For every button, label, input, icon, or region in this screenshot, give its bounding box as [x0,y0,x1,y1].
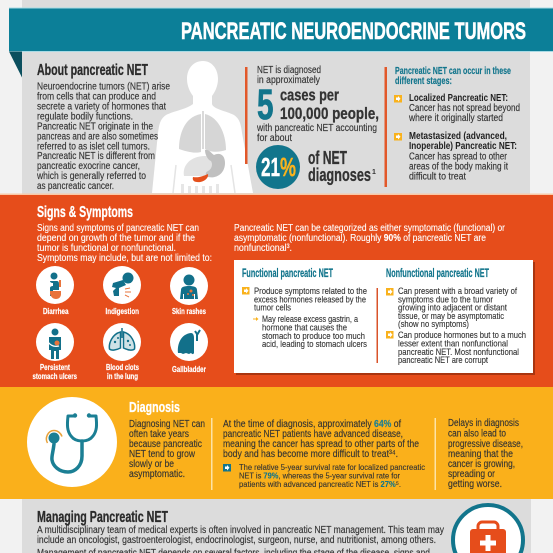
text: advanced disease statistics: meaning the cancer has spread to other parts of the [223,439,419,450]
text: diagnosing NET: often take years [129,429,189,440]
label: indigestion: Indigestion [106,306,139,316]
column: functional pancreatic NET: tumor cells [254,302,291,312]
label: blood clots in the lung: Blood clots [106,362,139,372]
statistic: 21% of NET diagnoses [256,145,376,189]
icon: medical kit [453,505,523,553]
text: advanced disease statistics: NET is 79%, whereas the 5-year survival rate for [239,470,400,480]
text: diagnosing NET: Diagnosing NET can [129,419,205,430]
text: managing paragraph: A multidisciplinary team of medical experts is often involved in pancreatic NET management. This team may [37,525,444,536]
text: diagnosing NET: slowly or be [129,459,174,470]
heading: managing pancreatic NET: Managing Pancreatic NET [37,509,168,526]
text: symptoms intro: Signs and symptoms of pancreatic NET can [37,223,199,234]
statistic: 21% of NET diagnoses: 1 [372,169,376,176]
heading: about pancreatic NET: About pancreatic NET [37,62,148,79]
column: nonfunctional pancreatic NET: Can present with a broad variety of [398,286,517,296]
label: blood clots in the lung: in the lung [107,371,138,381]
text: symptoms intro: Symptoms may include, but are not limited to: [37,253,212,264]
label: skin rashes: Skin rashes [172,306,206,316]
text: about paragraph: as pancreatic cancer. [37,181,114,192]
text: stages of pancreatic NET [394,65,520,182]
text: about paragraph: regulate bodily functions. [37,112,133,122]
text: about paragraph: Pancreatic NET originate in the [37,122,153,132]
column: functional pancreatic NET: acid, leading to stomach ulcers [262,339,367,349]
label: persistent stomach ulcers: stomach ulcers [32,371,77,381]
statistic: 5 cases per 100,000 people: cases per [280,86,339,104]
text: symptoms intro: depend on growth of the tumor and if the [37,233,195,244]
text: stages of pancreatic NET: difficult to treat [409,172,466,182]
statistic: 5 cases per 100,000 people: 5 [257,81,274,129]
column: functional pancreatic NET: May release excess gastrin, a [262,314,358,324]
statistic: 21% of NET diagnoses: % [280,152,296,182]
column: functional pancreatic NET: stomach to produce too much [262,331,365,341]
column: nonfunctional pancreatic NET: symptoms due to the tumor [398,294,493,304]
column: nonfunctional pancreatic NET [386,266,526,365]
statistic: 5 cases per 100,000 people: in approximately [257,75,320,86]
text: about paragraph: secrete a variety of hormones that [37,102,166,112]
panel: diagnosis [0,387,553,499]
text: diagnosing NET: because pancreatic [129,439,202,450]
text: stages of pancreatic NET: different stages: [395,75,452,87]
text: diagnosing NET [129,419,205,480]
text: diagnosing NET: NET tend to grow [129,449,196,460]
column: nonfunctional pancreatic NET: (show no symptoms) [398,319,469,329]
card: functional vs nonfunctional [234,260,535,375]
column: nonfunctional pancreatic NET: Nonfunctional pancreatic NET [386,266,489,280]
icon: indigestion [103,266,141,316]
label: diarrhea: Diarrhea [43,306,69,316]
statistic: 5 cases per 100,000 people [256,65,379,144]
text: delays in diagnosis: progressive disease, [448,439,523,450]
text: about paragraph: from cells that can produce and [37,92,156,102]
text: advanced disease statistics: The relative 5-year survival rate for localized pancreatic [239,462,426,472]
icon: persistent stomach ulcers [32,323,77,381]
icon: stethoscope [27,397,117,487]
heading: signs and symptoms: Signs & Symptoms [37,204,133,221]
label: gallbladder: Gallbladder [172,364,207,374]
statistic: 21% of NET diagnoses: of NET [308,148,347,168]
text: stages of pancreatic NET: areas of the body making it [409,162,508,172]
panel: about and statistics [22,0,530,194]
text: about paragraph: which is generally referred to [36,171,146,182]
column: functional pancreatic NET: hormone that causes the [262,322,347,332]
text: symptoms intro: tumor is functional or nonfunctional. [37,243,176,254]
text: about paragraph: Neuroendocrine tumors (NET) arise [37,82,170,92]
text: functional classification intro [234,223,506,254]
column: functional pancreatic NET: excess hormones released by the [254,294,366,304]
text: advanced disease statistics: body and has become more difficult to treat³⁴. [223,449,398,460]
column: nonfunctional pancreatic NET: tissue, or may be asymptomatic [398,311,504,321]
text: managing paragraph: include an oncologist, gastroenterologist, endocrinologist, surgeon, nurse, and nutritionist, among others. [37,535,436,546]
text: advanced disease statistics: At the time of diagnosis, approximately 64% of [223,419,401,430]
text: functional classification intro: Pancreatic NET can be categorized as either symptomatic (functional) or [234,223,506,234]
text: delays in diagnosis: meaning that the [448,449,513,460]
statistic: 5 cases per 100,000 people: with pancreatic NET accounting [256,123,377,134]
statistic: 5 cases per 100,000 people: 100,000 people, [280,104,379,123]
statistic: 21% of NET diagnoses: diagnoses [308,165,371,185]
text: stages of pancreatic NET: Localized Pancreatic NET: [409,93,508,104]
column: functional pancreatic NET: Produce symptoms related to the [254,286,367,296]
text: about paragraph: pancreas and are also sometimes [37,132,158,142]
statistic: 5 cases per 100,000 people: for about [257,133,292,144]
statistic: 21% of NET diagnoses: 21 [261,152,280,182]
label: persistent stomach ulcers [32,362,77,381]
text: functional classification intro: nonfunctional³. [234,243,292,254]
text: stages of pancreatic NET: Inoperable) Pancreatic NET: [409,141,517,152]
heading: diagnosis: Diagnosis [129,400,180,416]
label: blood clots in the lung [106,362,139,381]
column: nonfunctional pancreatic NET: pancreatic NET are corrupt [398,355,488,365]
icon: diarrhea [36,266,74,316]
text: symptoms intro [37,223,212,264]
text: advanced disease statistics: pancreatic NET patients have advanced disease, [223,429,403,440]
text: about paragraph: referred to as islet cell tumors. [37,142,150,152]
text: about paragraph: pancreatic exocrine cancer, [37,161,140,172]
text: delays in diagnosis: Delays in diagnosis [448,418,519,429]
text: delays in diagnosis: can also lead to [448,428,506,440]
column: nonfunctional pancreatic NET: pancreatic NET. Most nonfunctional [398,347,519,357]
panel: managing pancreatic NET [22,499,531,553]
text: about paragraph: Pancreatic NET is different from [37,151,155,162]
text: stages of pancreatic NET: Cancer has spread to other [409,152,508,162]
title banner [9,8,553,78]
icon: gallbladder [170,323,208,374]
label: persistent stomach ulcers: Persistent [40,362,70,372]
icon: skin rashes [170,267,208,316]
column: functional pancreatic NET: Functional pancreatic NET [242,266,333,280]
text: stages of pancreatic NET: Cancer has not spread beyond [409,103,520,114]
text: managing paragraph [37,525,444,553]
text: advanced disease statistics: patients with advanced pancreatic NET is 27%⁵. [239,479,401,489]
text: advanced disease statistics [223,419,426,489]
text: diagnosing NET: asymptomatic. [129,469,185,480]
text: delays in diagnosis: spreading or [448,469,496,480]
column: functional pancreatic NET [242,266,367,349]
text: about paragraph [36,82,170,192]
text: functional classification intro: asymptomatic (nonfunctional). Roughly 90% of pancreatic NET are [234,233,486,244]
panel: signs and symptoms [0,194,553,387]
text: delays in diagnosis [448,418,523,490]
column: nonfunctional pancreatic NET: lesser extent than nonfunctional [398,338,508,348]
text: stages of pancreatic NET: where it originally started [408,113,503,124]
text: delays in diagnosis: getting worse. [448,479,502,490]
column: nonfunctional pancreatic NET: Can produce hormones but to a much [398,330,526,340]
text: delays in diagnosis: cancer is growing, [448,459,515,470]
icon: blood clots in the lung [103,323,141,381]
body illustration [152,61,253,193]
statistic: 5 cases per 100,000 people: NET is diagnosed [257,65,321,76]
column: nonfunctional pancreatic NET: growing into adjacent or distant [398,302,507,312]
text: stages of pancreatic NET: Metastasized (advanced, [409,131,507,142]
